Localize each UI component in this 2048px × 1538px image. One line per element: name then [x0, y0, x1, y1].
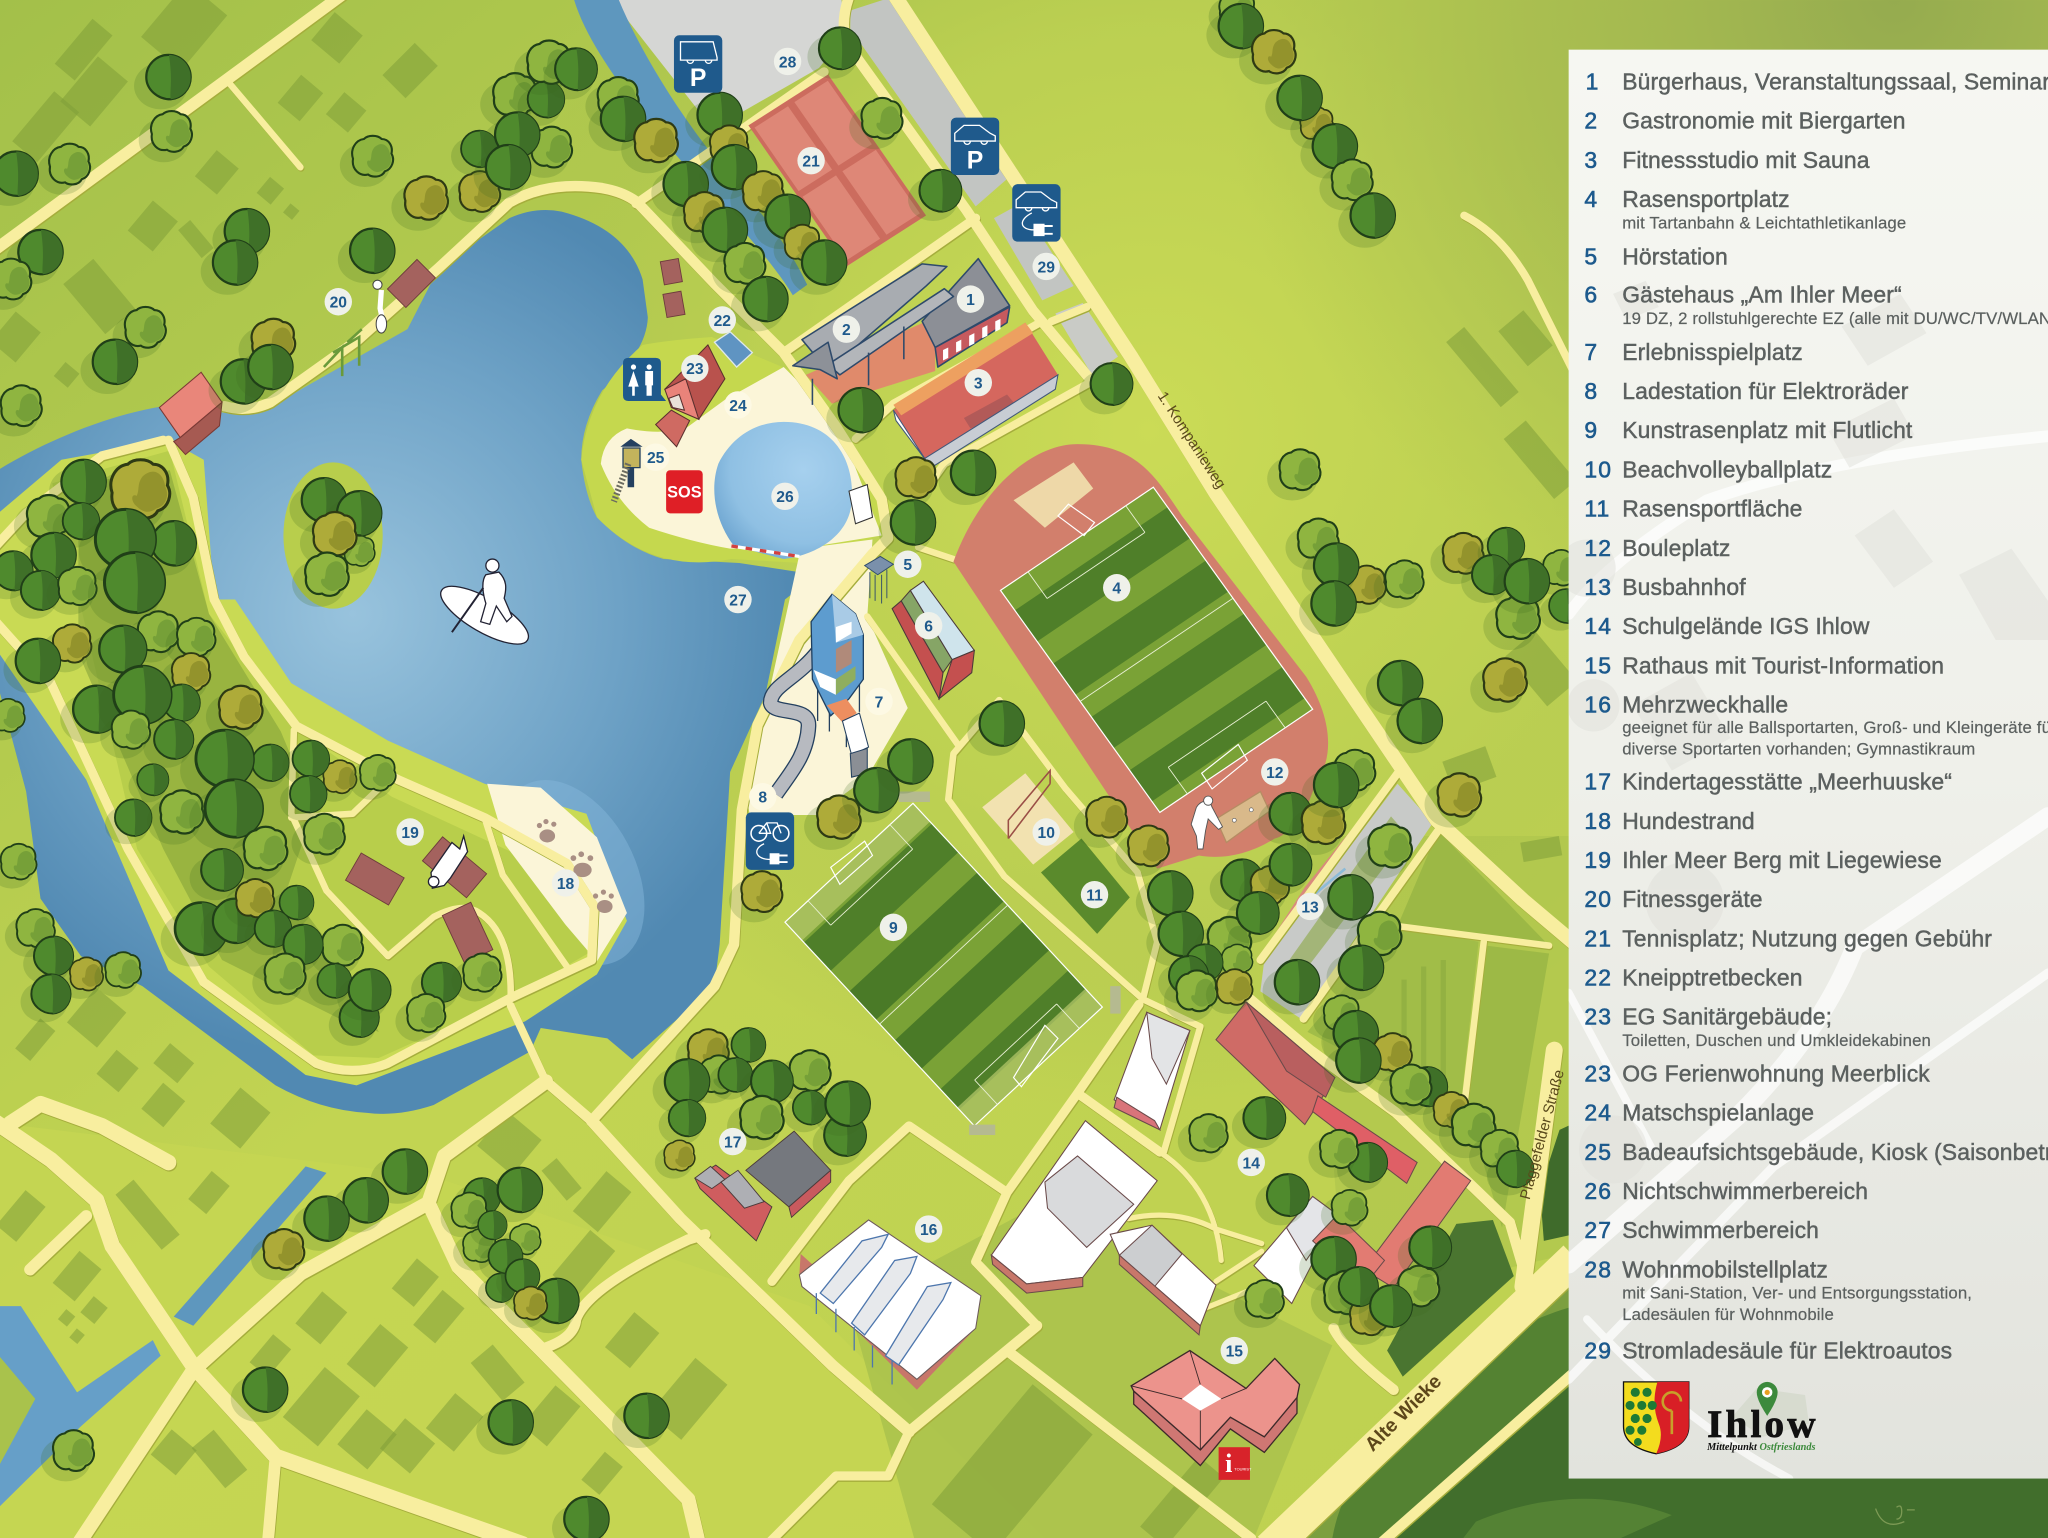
sports lawn 11 — [1041, 839, 1130, 934]
legend row 22: Kneipptretbecken — [1622, 964, 1803, 990]
numbered map badges: 12 — [1266, 765, 1284, 782]
boule player figure — [1191, 796, 1223, 849]
water: lake and channels — [0, 0, 816, 1513]
Ihlow logo — [1706, 1382, 1816, 1453]
legend row 28: Ladesäulen für Wohnmobile — [1622, 1305, 1834, 1324]
legend row 24: 24 — [1584, 1100, 1612, 1126]
building 23: sanitary house — [656, 345, 725, 447]
legend row 27: 27 — [1584, 1217, 1612, 1243]
beach chair — [849, 485, 872, 524]
boule court 12 — [1216, 792, 1270, 842]
legend row 6: 19 DZ, 2 rollstuhlgerechte EZ (alle mit DU/WC/TV/WLAN) — [1622, 309, 2048, 328]
legend row 9: Kunstrasenplatz mit Flutlicht — [1622, 417, 1913, 443]
legend row 26: Nichtschwimmerbereich — [1622, 1178, 1868, 1204]
icon: motorhome parking: P — [690, 65, 706, 92]
numbered map badges: 26 — [776, 489, 794, 506]
street names: 1. Kompanieweg — [1154, 389, 1229, 492]
icon: tourist information — [1219, 1447, 1252, 1480]
dog beach paw prints — [537, 819, 614, 913]
legend row 27: Schwimmerbereich — [1622, 1217, 1819, 1243]
icon: boat house — [159, 372, 222, 455]
legend row 21: Tennisplatz; Nutzung gegen Gebühr — [1622, 925, 1992, 951]
icon: motorhome parking — [674, 35, 722, 93]
legend row 22: 22 — [1584, 964, 1612, 990]
numbered map badges: 27 — [729, 592, 747, 609]
icon: car parking — [951, 118, 999, 175]
legend row 23 ground floor: 23 — [1584, 1004, 1612, 1030]
legend row 23 upper floor: 23 — [1584, 1060, 1612, 1086]
icon: toilets — [623, 358, 666, 401]
numbered map badges: 16 — [920, 1222, 938, 1239]
numbered map badges: 1 — [966, 292, 975, 309]
legend row 11: 11 — [1584, 496, 1610, 522]
legend row 16: 16 — [1584, 692, 1612, 718]
numbered map badges: 24 — [729, 398, 747, 415]
paddle boarder — [433, 559, 536, 655]
legend row 23 ground floor: EG Sanitärgebäude; — [1622, 1004, 1832, 1030]
legend row 13: Busbahnhof — [1622, 574, 1746, 600]
numbered map badges: 23 — [686, 361, 704, 378]
legend row 17: Kindertagesstätte „Meerhuuske“ — [1622, 769, 1952, 795]
numbered map badges: 25 — [647, 450, 665, 467]
legend row 6 — [1584, 281, 2048, 328]
legend row 15: Rathaus mit Tourist-Information — [1622, 652, 1944, 678]
numbered map badges: 8 — [758, 790, 767, 807]
play tower 7 with slide — [771, 594, 869, 794]
legend row 12: 12 — [1584, 535, 1612, 561]
icon: tourist information: i — [1225, 1449, 1232, 1478]
legend row 8: 8 — [1584, 378, 1598, 404]
swimming beach — [581, 337, 901, 564]
numbered map badges: 3 — [974, 376, 983, 393]
numbered map badges: 6 — [924, 619, 933, 636]
numbered map badges: 10 — [1037, 825, 1055, 842]
legend row 18: Hundestrand — [1622, 808, 1755, 834]
legend row 15: 15 — [1584, 652, 1612, 678]
icon: SOS — [666, 470, 703, 513]
Ihlow logo: Mittelpunkt Ostfrieslands — [1706, 1442, 1816, 1453]
tennis courts 21 — [748, 74, 926, 266]
street names: Plaggefelder Straße — [1517, 1068, 1568, 1201]
legend row 19: 19 — [1584, 847, 1612, 873]
icon: SOS: SOS — [667, 484, 702, 502]
house footprints — [0, 0, 1577, 1538]
legend row 23 ground floor — [1584, 1004, 1931, 1050]
legend row 2: 2 — [1584, 108, 1598, 134]
numbered map badges: 18 — [557, 876, 575, 893]
icon: tourist information: TOURIST — [1234, 1467, 1252, 1472]
dog beach — [487, 784, 627, 961]
legend row 3: 3 — [1584, 147, 1598, 173]
building 6: guest house — [892, 581, 974, 699]
fitness equipment 20 — [324, 280, 387, 376]
building 16: multipurpose hall — [799, 1220, 981, 1390]
legend row 14: 14 — [1584, 613, 1612, 639]
non-swimmer pool — [714, 422, 852, 559]
icon: car parking: P — [967, 148, 983, 175]
legend row 20: 20 — [1584, 886, 1612, 912]
legend row 11: Rasensportfläche — [1622, 496, 1803, 522]
legend row 16: Mehrzweckhalle — [1622, 692, 1788, 718]
numbered map badges: 14 — [1243, 1155, 1260, 1172]
street names: Alte Wieke — [1361, 1370, 1446, 1456]
numbered map badges: 2 — [842, 322, 851, 339]
legend row 13: 13 — [1584, 574, 1612, 600]
legend row 16 — [1584, 692, 2048, 758]
legend row 4 — [1584, 186, 1906, 233]
building 17: kindergarten — [695, 1131, 831, 1241]
legend row 6: Gästehaus „Am Ihler Meer“ — [1622, 281, 1902, 307]
legend row 20: Fitnessgeräte — [1622, 886, 1763, 912]
legend row 17: 17 — [1584, 769, 1612, 795]
sunbathing figure — [428, 836, 468, 888]
building 14: school complex — [991, 1002, 1471, 1335]
numbered map badges: 29 — [1037, 259, 1055, 276]
peninsula — [0, 440, 627, 1085]
island — [283, 462, 383, 609]
legend row 23 upper floor: OG Ferienwohnung Meerblick — [1622, 1060, 1930, 1086]
numbered map badges: 7 — [875, 694, 884, 711]
legend row 29: Stromladesäule für Elektroautos — [1622, 1337, 1952, 1363]
parking areas — [610, 0, 1433, 1019]
legend row 10: Beachvolleyballplatz — [1622, 456, 1832, 482]
numbered map badges: 17 — [724, 1134, 742, 1151]
numbered map badges: 13 — [1301, 899, 1319, 916]
listening station 5 — [865, 556, 893, 603]
sports field 4 with track — [953, 444, 1328, 869]
Ihlow logo: Ihlow — [1707, 1403, 1816, 1446]
numbered map badges: 11 — [1086, 888, 1103, 905]
legend row 5: Hörstation — [1622, 244, 1728, 270]
beach volleyball court 10 — [982, 771, 1074, 865]
signature — [1876, 1506, 1915, 1524]
icon: electric car charging — [1012, 184, 1061, 242]
sports field 9 — [785, 792, 1121, 1135]
legend row 29: 29 — [1584, 1337, 1612, 1363]
legend row 6: 6 — [1584, 281, 1598, 307]
icon: e-bike charging — [746, 812, 794, 870]
legend row 9: 9 — [1584, 417, 1598, 443]
legend row 19: Ihler Meer Berg mit Liegewiese — [1622, 847, 1942, 873]
legend row 4: 4 — [1584, 186, 1598, 212]
numbered map badges: 22 — [714, 313, 731, 330]
legend row 24: Matschspielanlage — [1622, 1100, 1814, 1126]
legend row 18: 18 — [1584, 808, 1612, 834]
bathing area bench decks — [346, 259, 685, 963]
numbered map badges: 4 — [1112, 581, 1121, 598]
forest south of Alte Wieke — [1270, 1123, 2048, 1538]
legend row 5: 5 — [1584, 244, 1598, 270]
legend row 10: 10 — [1584, 456, 1612, 482]
legend row 16: diverse Sportarten vorhanden; Gymnastikraum — [1622, 739, 1975, 758]
trees — [0, 0, 1583, 1538]
numbered map badges: 19 — [401, 825, 419, 842]
legend row 12: Bouleplatz — [1622, 535, 1730, 561]
legend row 16: geeignet für alle Ballsportarten, Groß- und Kleingeräte für — [1622, 718, 2048, 737]
legend row 2: Gastronomie mit Biergarten — [1622, 108, 1906, 134]
numbered map badges: 28 — [779, 54, 797, 71]
building 15: town hall — [1131, 1351, 1300, 1465]
legend row 25: 25 — [1584, 1139, 1612, 1165]
legend row 4: mit Tartanbahn & Leichtathletikanlage — [1622, 214, 1906, 233]
numbered map badges: 20 — [330, 295, 347, 312]
paths and roads — [0, 0, 1576, 1538]
legend row 28: Wohnmobilstellplatz — [1622, 1256, 1828, 1282]
street names — [1154, 389, 1568, 1456]
legend row 28 — [1584, 1256, 1972, 1324]
legend row 28: 28 — [1584, 1256, 1612, 1282]
legend row 7: Erlebnisspielplatz — [1622, 339, 1803, 365]
legend row 28: mit Sani-Station, Ver- und Entsorgungsstation, — [1622, 1283, 1972, 1302]
legend row 8: Ladestation für Elektroräder — [1622, 378, 1909, 404]
allotment fields — [1307, 831, 1549, 1228]
legend row 14: Schulgelände IGS Ihlow — [1622, 613, 1870, 639]
numbered map badges: 15 — [1226, 1343, 1243, 1360]
adventure playground sand — [744, 539, 908, 815]
legend row 26: 26 — [1584, 1178, 1612, 1204]
numbered map badges — [325, 48, 1324, 1364]
legend panel — [1558, 50, 2048, 1479]
numbered map badges: 5 — [903, 557, 912, 574]
building 1 and 2: Buergerhaus — [793, 259, 1010, 405]
legend row 21: 21 — [1584, 925, 1612, 951]
legend row 1: 1 — [1586, 68, 1600, 94]
legend row 4: Rasensportplatz — [1622, 186, 1790, 212]
legend row 3: Fitnessstudio mit Sauna — [1622, 147, 1870, 173]
numbered map badges: 9 — [889, 920, 898, 937]
lifeguard tower 25 — [614, 439, 643, 502]
kneipp pool 22 — [714, 332, 752, 367]
legend row 7: 7 — [1584, 339, 1598, 365]
numbered map badges: 21 — [802, 154, 820, 171]
coat of arms — [1624, 1382, 1689, 1454]
building 3: fitness studio — [893, 323, 1058, 468]
legend row 23 ground floor: Toiletten, Duschen und Umkleidekabinen — [1622, 1031, 1931, 1050]
